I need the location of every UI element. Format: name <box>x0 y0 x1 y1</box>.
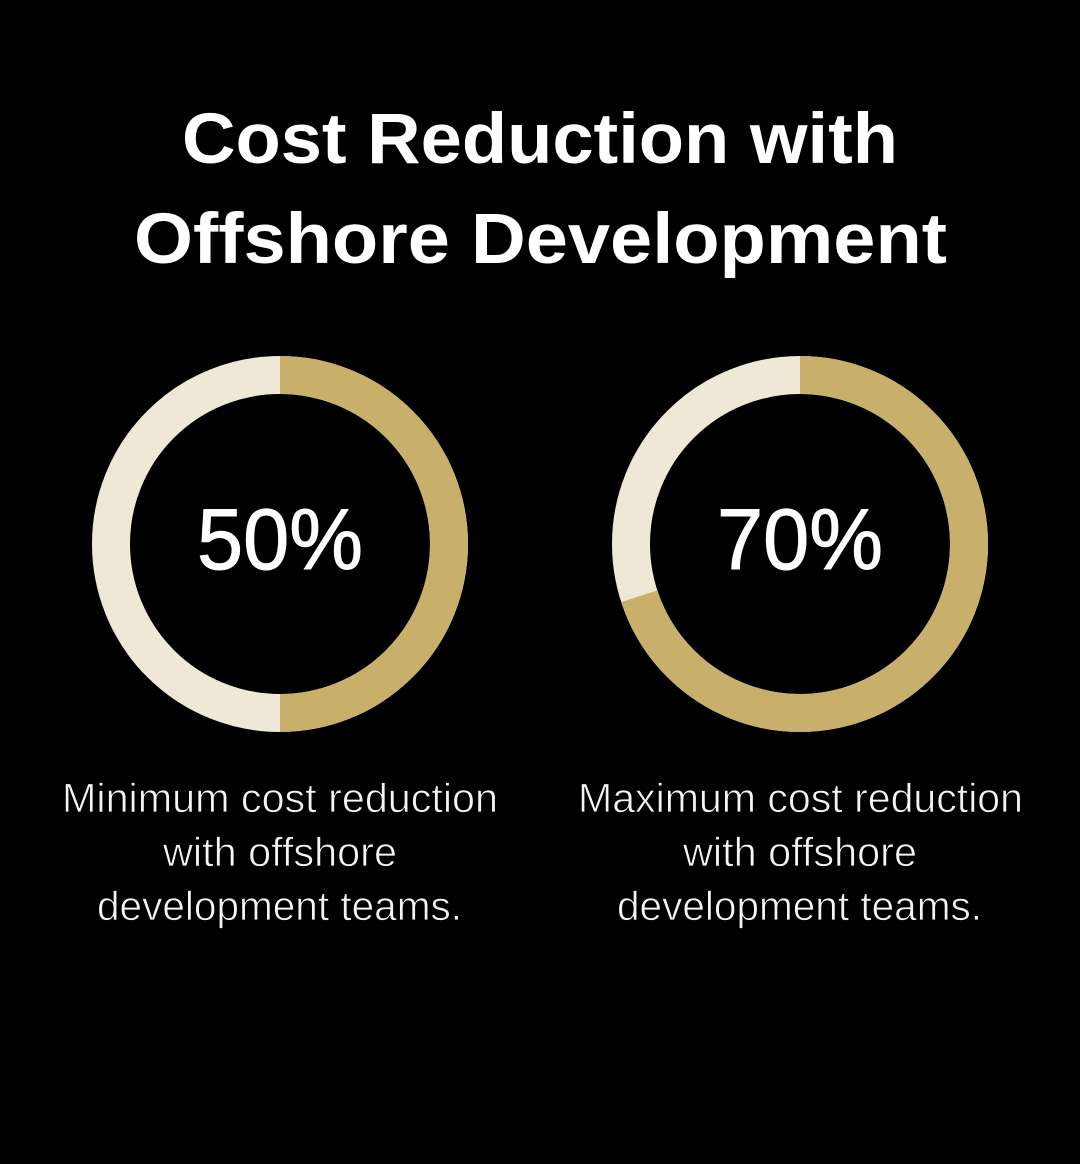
donut chart: 70% <box>631 375 969 713</box>
caption: minimum: with offshore <box>162 829 397 875</box>
title <box>134 100 947 279</box>
panel: maximum cost reduction <box>578 375 1023 929</box>
panel: minimum cost reduction <box>62 375 498 929</box>
caption: maximum: Maximum cost reduction <box>578 775 1023 821</box>
title: Cost Reduction with <box>182 100 898 179</box>
caption: minimum: Minimum cost reduction <box>62 775 498 821</box>
caption: maximum: with offshore <box>682 829 917 875</box>
caption: maximum: development teams. <box>617 883 982 929</box>
title: Offshore Development <box>134 200 947 279</box>
caption: maximum <box>578 775 1023 929</box>
caption: minimum: development teams. <box>97 883 462 929</box>
value: 50%: 50% <box>197 492 363 588</box>
caption: minimum <box>62 775 498 929</box>
donut chart: 50% <box>111 375 449 713</box>
value: 70%: 70% <box>717 492 883 588</box>
